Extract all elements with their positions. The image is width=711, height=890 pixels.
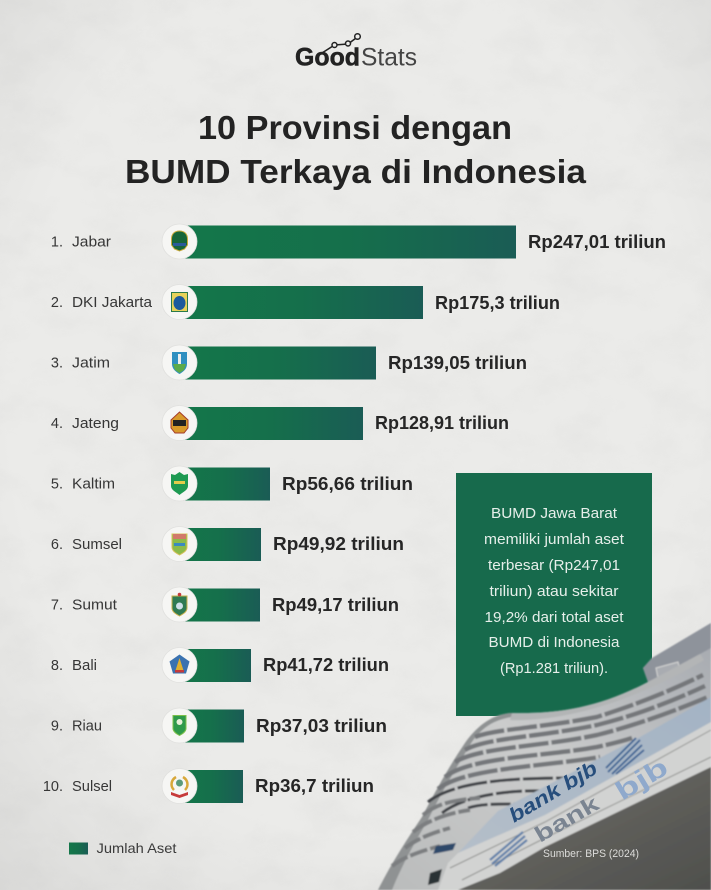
row 10: Sulsel: 10. — [43, 779, 63, 795]
row 9: Riau — [51, 708, 244, 743]
sign lettering: bjb — [610, 752, 673, 806]
row 2: DKI Jakarta — [51, 284, 423, 320]
value labels: Rp247,01 triliun — [528, 231, 666, 252]
bar chart — [43, 224, 516, 804]
callout panel: triliun) atau sekitar — [490, 584, 619, 600]
row 9: Riau: Riau — [72, 718, 102, 734]
callout panel: (Rp1.281 triliun). — [500, 661, 608, 677]
row 7: Sumut — [51, 587, 260, 622]
callout panel: 19,2% dari total aset — [484, 610, 624, 626]
value labels: Rp41,72 triliun — [263, 654, 389, 675]
row 5: Kaltim: Kaltim — [72, 476, 115, 492]
value labels: Rp49,17 triliun — [272, 594, 399, 615]
value labels: Rp128,91 triliun — [375, 412, 509, 433]
row 3: Jatim: Jatim — [72, 356, 110, 372]
row 7: Sumut: 7. — [51, 598, 63, 614]
value labels: Rp36,7 triliun — [255, 775, 374, 796]
row 6: Sumsel: Sumsel — [72, 537, 122, 553]
legend: Jumlah Aset — [96, 840, 177, 856]
sign lettering: bank bjb — [505, 757, 601, 827]
window rows — [438, 675, 708, 789]
value labels: Rp37,03 triliun — [256, 715, 387, 736]
row 2: DKI Jakarta: 2. — [51, 295, 63, 311]
row 7: Sumut: Sumut — [72, 598, 117, 614]
value labels: Rp139,05 triliun — [388, 352, 527, 373]
row 5: Kaltim: 5. — [51, 476, 63, 492]
value labels: Rp49,92 triliun — [273, 533, 404, 554]
logo: GoodStats — [295, 34, 417, 72]
building photo: bank bjb — [378, 623, 711, 890]
row 1: Jabar: Jabar — [72, 234, 111, 250]
source: Sumber: BPS (2024) — [543, 848, 639, 860]
row 3: Jatim: 3. — [51, 356, 63, 372]
row 4: Jateng — [51, 406, 363, 440]
title — [125, 110, 586, 191]
logo: GoodStats: Stats — [361, 44, 417, 72]
row 5: Kaltim — [51, 466, 270, 501]
row 10: Sulsel: Sulsel — [72, 779, 112, 795]
sign band — [458, 697, 711, 853]
row 1: Jabar: 1. — [51, 234, 63, 250]
callout panel: BUMD di Indonesia — [488, 635, 620, 651]
row 8: Bali: Bali — [72, 658, 97, 674]
callout panel: BUMD Jawa Barat — [491, 506, 617, 522]
value labels: Rp56,66 triliun — [282, 473, 413, 494]
callout panel — [456, 473, 652, 716]
row 1: Jabar — [51, 224, 516, 259]
callout panel: memiliki jumlah aset — [484, 532, 624, 548]
row 4: Jateng: Jateng — [72, 416, 119, 432]
title: 10 Provinsi dengan — [198, 110, 512, 147]
row 8: Bali: 8. — [51, 658, 63, 674]
callout panel: terbesar (Rp247,01 — [488, 558, 620, 574]
row 3: Jatim — [51, 345, 376, 380]
logo: GoodStats: Good — [295, 44, 360, 72]
row 8: Bali — [51, 648, 251, 682]
value labels: Rp175,3 triliun — [435, 292, 560, 313]
row 10: Sulsel — [43, 768, 243, 804]
row 4: Jateng: 4. — [51, 416, 63, 432]
row 6: Sumsel — [51, 526, 261, 562]
title: BUMD Terkaya di Indonesia — [125, 154, 586, 191]
sign lettering — [505, 752, 673, 847]
sign lettering: bank — [530, 790, 604, 847]
row 9: Riau: 9. — [51, 718, 63, 734]
value labels — [255, 231, 666, 796]
row 6: Sumsel: 6. — [51, 537, 63, 553]
row 2: DKI Jakarta: DKI Jakarta — [72, 295, 153, 311]
